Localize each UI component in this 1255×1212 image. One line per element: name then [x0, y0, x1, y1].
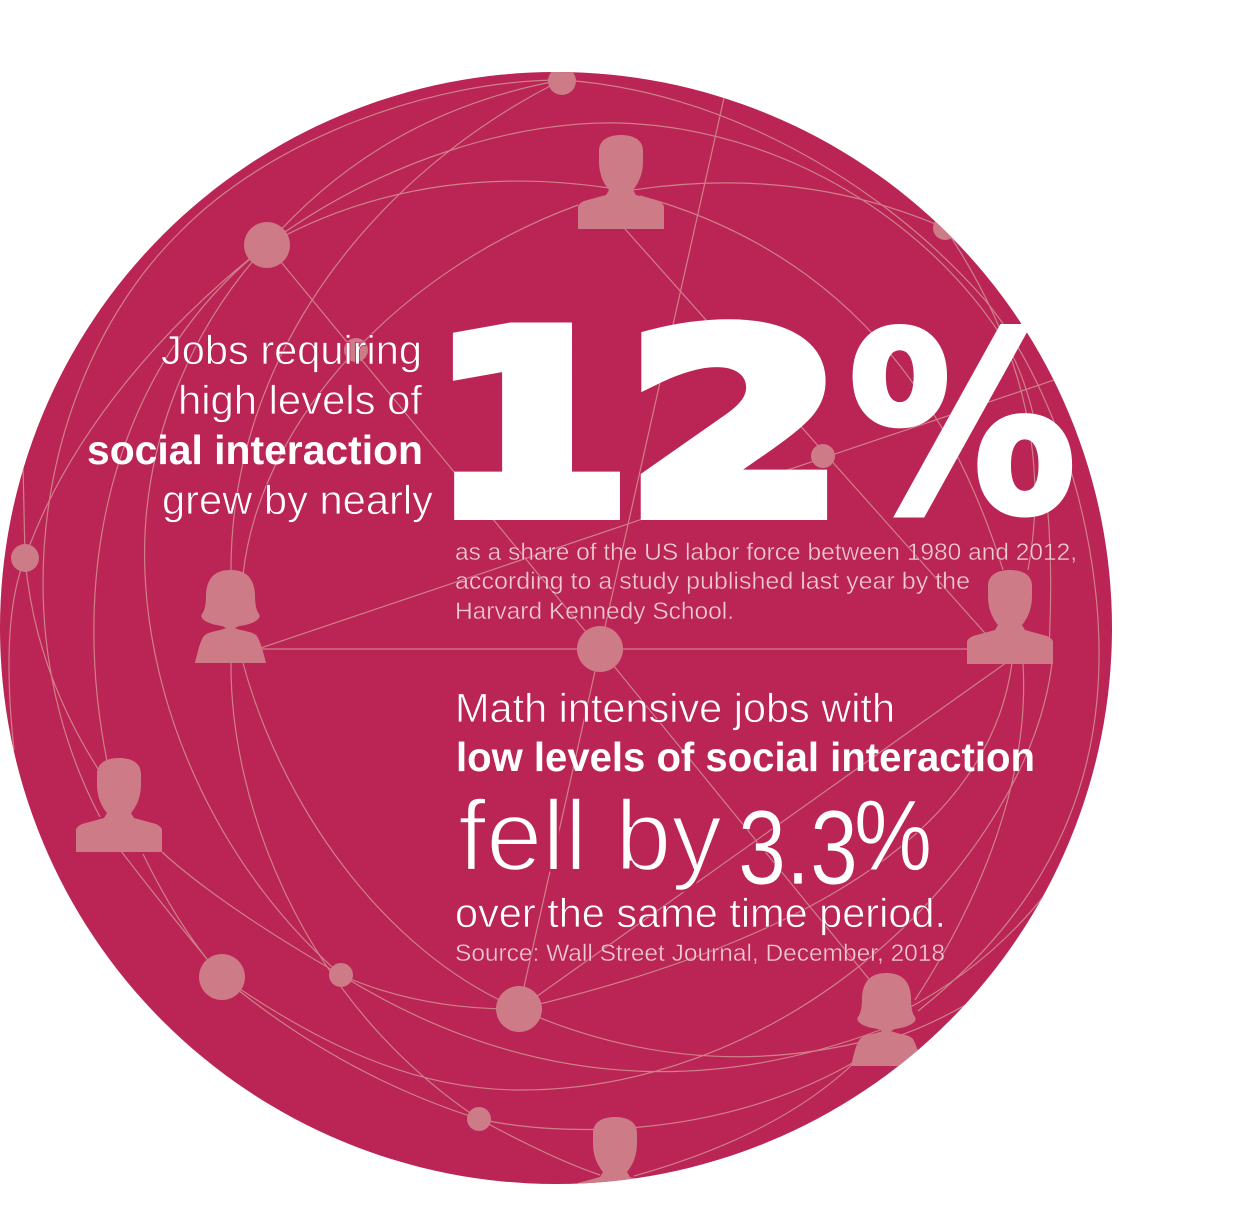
icon: man bottom: [576, 1117, 637, 1184]
big number: 12%: 2: [626, 281, 844, 571]
headline: jobs requiring: grew by nearly: [162, 477, 434, 523]
big number: 12%: %: [848, 282, 1077, 570]
description text: according to a study published last year by the: [455, 568, 970, 595]
network nodes: [11, 67, 957, 1131]
network connection lines: [9, 80, 1099, 1176]
description text: [455, 539, 1077, 625]
headline: jobs requiring: [87, 327, 434, 523]
big number: 12%: [430, 281, 1077, 571]
second statement: fell by: [458, 780, 722, 892]
headline: jobs requiring: Jobs requiring: [161, 327, 422, 373]
second statement: 3.3: [738, 789, 858, 907]
second statement: Math intensive jobs with: [455, 685, 895, 731]
icon: man top: [578, 135, 664, 229]
icon: woman left: [195, 570, 266, 663]
second statement: low levels of social interaction: [456, 734, 1035, 780]
big number: 12%: 1: [430, 281, 631, 571]
icon: man left: [76, 758, 162, 852]
headline: jobs requiring: social interaction: [87, 427, 423, 473]
second statement: [455, 685, 1035, 936]
source: Source: Wall Street Journal, December, 2018: [455, 940, 945, 967]
second statement: %: [854, 780, 932, 892]
description text: as a share of the US labor force between 1980 and 2012,: [455, 539, 1077, 566]
description text: Harvard Kennedy School.: [455, 598, 734, 625]
icon: woman bottom right: [851, 973, 922, 1066]
headline: jobs requiring: high levels of: [178, 377, 423, 423]
second statement: over the same time period.: [455, 890, 946, 936]
icon: man right: [967, 570, 1053, 664]
